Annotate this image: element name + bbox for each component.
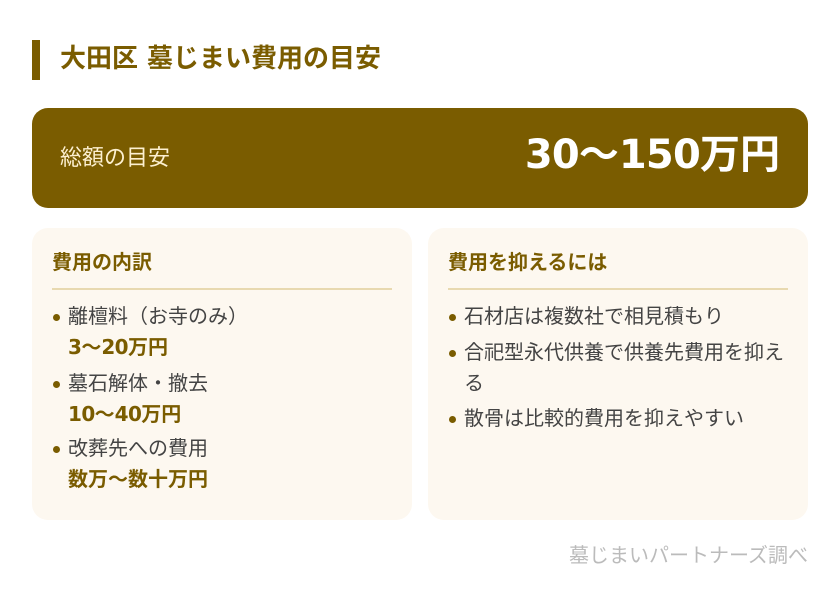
panel: total estimate (32, 108, 808, 208)
tip: scattering ashes: 散骨は比較的費用を抑えやすい (464, 406, 744, 430)
tip: perpetual memorial (449, 340, 784, 395)
tip: multiple quotes: 石材店は複数社で相見積もり (464, 304, 724, 328)
item: temple leaving fee: 3〜20万円 (68, 335, 168, 359)
item: new burial site cost (53, 436, 208, 491)
item: temple leaving fee (53, 304, 248, 359)
item: gravestone removal (53, 371, 208, 426)
breakdown heading: 費用の内訳 (52, 250, 152, 274)
panel: cost breakdown (32, 228, 412, 520)
total value: 30〜150万円 (525, 132, 780, 178)
item: gravestone removal: 10〜40万円 (68, 402, 181, 426)
item: new burial site cost: 改葬先への費用 (68, 436, 208, 460)
title (32, 40, 808, 80)
item: new burial site cost: 数万〜数十万円 (68, 467, 208, 491)
title: 大田区 墓じまい費用の目安 (60, 44, 381, 74)
item: temple leaving fee: 離檀料（お寺のみ） (68, 304, 248, 328)
tip: perpetual memorial: る (464, 371, 484, 395)
item: gravestone removal: 墓石解体・撤去 (68, 371, 208, 395)
total label: 総額の目安 (60, 146, 170, 171)
tip: perpetual memorial: 合祀型永代供養で供養先費用を抑え (464, 340, 784, 364)
tips heading: 費用を抑えるには (448, 250, 607, 274)
source note: 墓じまいパートナーズ調べ (569, 543, 808, 567)
panel: keeping costs down (428, 228, 808, 520)
